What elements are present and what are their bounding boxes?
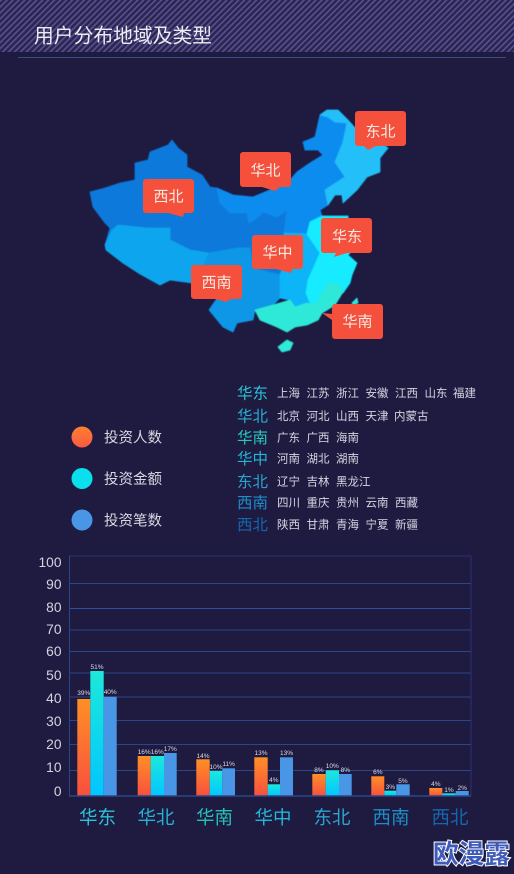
percent labels: 16%: [151, 749, 164, 756]
title: 用户分布地域及类型: [34, 26, 212, 48]
row: Southwest: 西藏: [395, 497, 418, 510]
map label: Northwest: [143, 179, 194, 217]
row: East: 山东: [424, 387, 448, 400]
row: Central: 湖南: [336, 452, 359, 466]
row: Northwest: [237, 516, 418, 534]
y axis labels: 10: [46, 760, 62, 775]
legend item: transactions: 投资笔数: [104, 512, 162, 530]
region: East: [306, 216, 357, 305]
row: Southwest: 云南: [366, 496, 388, 510]
map label: North: 华北: [250, 162, 281, 180]
row: Southwest: 西南: [237, 494, 268, 512]
y axis labels: [38, 555, 62, 799]
x axis labels: 华中: [254, 807, 292, 828]
x axis labels: 华南: [196, 807, 233, 828]
percent labels: 14%: [196, 753, 210, 760]
bars: South: [196, 759, 235, 796]
row: Southwest: [237, 494, 418, 512]
row: Northwest: 西北: [237, 516, 269, 534]
percent labels: 16%: [138, 749, 151, 756]
x axis labels: 西南: [372, 807, 410, 828]
percent labels: 13%: [280, 750, 293, 757]
row: East: 江苏: [306, 387, 330, 400]
x axis labels: [79, 807, 469, 828]
y axis labels: 100: [38, 555, 62, 570]
row: East: 华东: [237, 384, 268, 402]
percent labels: [77, 664, 467, 794]
row: Central: 湖北: [306, 452, 330, 466]
region: South: [255, 283, 343, 332]
y axis labels: 90: [46, 577, 62, 592]
legend item: amount: 投资金额: [104, 471, 162, 488]
region: Hainan: [278, 340, 293, 352]
region: Southwest: [192, 248, 280, 332]
y axis labels: 40: [46, 691, 62, 706]
percent labels: 10%: [326, 763, 339, 770]
percent labels: 4%: [269, 777, 279, 784]
row: North: 华北: [237, 408, 269, 426]
y axis labels: 80: [46, 600, 62, 615]
row: East: 上海: [277, 386, 300, 400]
region to province list: [237, 384, 476, 534]
row: South: 华南: [237, 429, 268, 447]
map label: Central: 华中: [262, 244, 293, 262]
bars: Southwest: [371, 776, 410, 796]
row: North: 山西: [336, 410, 359, 423]
row: Central: 河南: [277, 452, 300, 466]
header band: [0, 0, 514, 52]
region: Central: [280, 233, 320, 307]
row: South: [237, 429, 359, 447]
x axis labels: 华东: [79, 807, 116, 828]
row: East: [237, 384, 476, 402]
region: Northwest: [90, 140, 287, 275]
percent labels: 51%: [90, 664, 104, 671]
percent labels: 8%: [341, 767, 350, 774]
row: Northwest: 陕西: [277, 518, 300, 532]
map label: North: [240, 152, 291, 191]
region: North: [217, 115, 347, 234]
percent labels: 3%: [386, 784, 395, 791]
percent labels: 5%: [398, 778, 408, 785]
row: Northwest: 青海: [336, 518, 359, 532]
row: Northeast: 辽宁: [277, 474, 300, 488]
row: Southwest: 四川: [277, 497, 300, 510]
map label: Northeast: 东北: [365, 124, 396, 140]
y axis labels: 70: [46, 622, 62, 637]
row: East: 福建: [453, 386, 476, 400]
percent labels: 4%: [431, 781, 441, 788]
row: East: 江西: [395, 387, 418, 400]
map label: East: [321, 218, 372, 257]
region: Tibet: [105, 225, 209, 285]
watermark: 欧漫露: [433, 839, 510, 869]
y axis labels: 20: [46, 737, 62, 752]
row: Southwest: 贵州: [336, 497, 359, 510]
bar chart: [38, 555, 471, 828]
row: Northwest: 新疆: [395, 518, 418, 532]
region: Taiwan: [352, 298, 358, 305]
row: Northeast: [237, 473, 371, 491]
row: Northeast: 吉林: [306, 474, 330, 488]
y axis labels: 60: [46, 644, 62, 659]
row: North: 天津: [366, 410, 388, 423]
percent labels: 13%: [254, 750, 268, 757]
row: South: 广西: [306, 431, 330, 444]
row: South: 广东: [277, 431, 300, 444]
map label: Northwest: 西北: [153, 188, 184, 206]
bars: Northwest: [429, 788, 469, 796]
row: Northwest: 宁夏: [366, 518, 389, 532]
row: Central: [237, 450, 359, 468]
row: North: [237, 408, 428, 426]
x axis labels: 东北: [313, 807, 351, 828]
row: South: 海南: [336, 430, 359, 444]
percent labels: 39%: [77, 690, 91, 697]
percent labels: 8%: [314, 767, 324, 774]
percent labels: 1%: [444, 787, 454, 794]
percent labels: 2%: [457, 785, 467, 792]
row: Southwest: 重庆: [306, 496, 330, 510]
row: Northeast: 黑龙江: [336, 475, 371, 488]
x axis labels: 华北: [137, 807, 175, 828]
y axis labels: 30: [46, 714, 62, 729]
row: Northeast: 东北: [237, 473, 269, 491]
map label: East: 华东: [332, 228, 362, 246]
row: North: 北京: [277, 409, 300, 423]
x axis labels: 西北: [431, 807, 469, 828]
bars: Northeast: [312, 770, 352, 796]
legend: [72, 426, 162, 530]
bars: North: [138, 753, 177, 796]
row: Central: 华中: [237, 450, 268, 468]
bars: [69, 671, 471, 796]
bars: East: [77, 671, 117, 796]
y axis labels: 50: [46, 668, 62, 683]
map label: South: [322, 304, 383, 339]
row: East: 浙江: [336, 387, 359, 400]
map label: South: 华南: [342, 314, 373, 330]
percent labels: 10%: [209, 764, 223, 771]
row: Northwest: 甘肃: [306, 519, 330, 532]
map label: Southwest: 西南: [201, 274, 232, 292]
bars: Central: [254, 757, 293, 796]
map label: Southwest: [191, 265, 242, 302]
legend item: investors: 投资人数: [104, 430, 162, 446]
percent labels: 17%: [164, 746, 177, 753]
percent labels: 40%: [104, 689, 117, 696]
map of China by region: [90, 110, 388, 352]
row: North: 内蒙古: [394, 409, 428, 423]
y axis labels: 0: [54, 784, 62, 799]
map label: Central: [252, 235, 303, 273]
row: East: 安徽: [366, 386, 389, 400]
map label: Northeast: [355, 111, 406, 150]
row: North: 河北: [306, 410, 330, 423]
percent labels: 11%: [222, 761, 235, 768]
region: Northeast: [320, 110, 388, 205]
percent labels: 6%: [373, 769, 383, 776]
